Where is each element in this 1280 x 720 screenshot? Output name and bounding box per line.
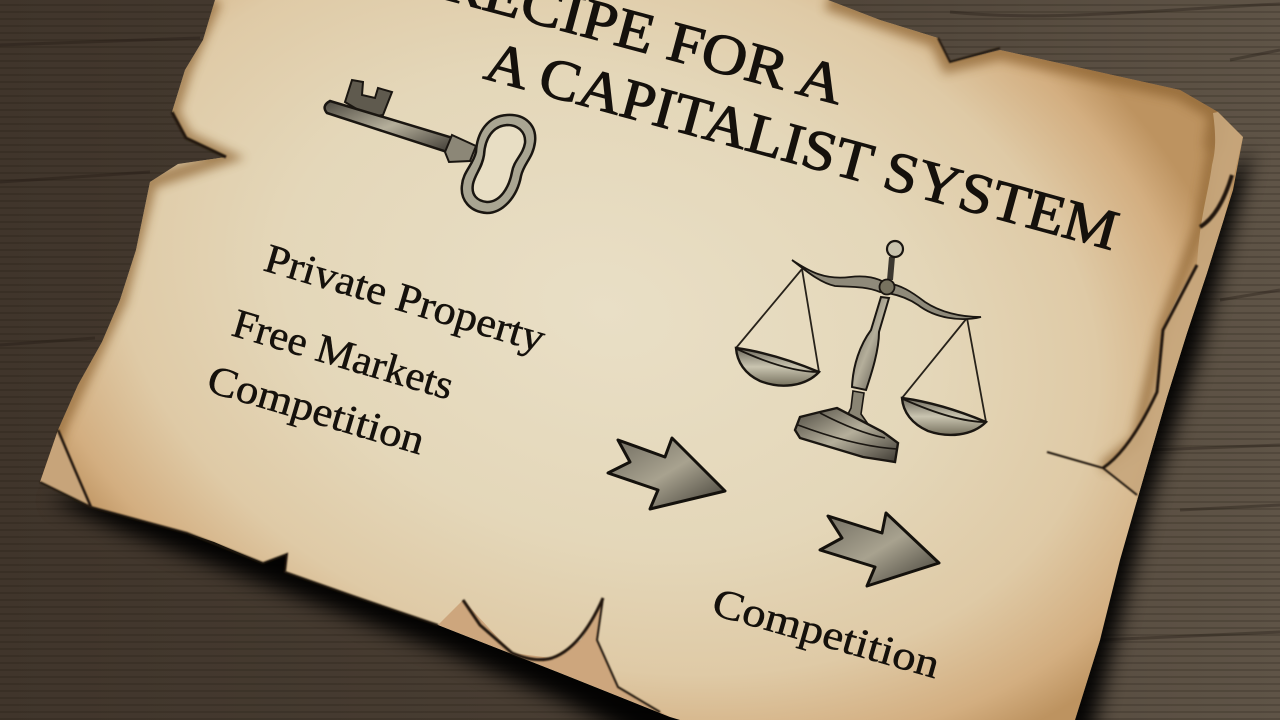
title: A CAPITALIST SYSTEM (479, 30, 1125, 263)
icon: balance scales (736, 241, 986, 462)
parchment shadow (50, 150, 1252, 720)
list: left ingredients: Competition (202, 356, 430, 463)
list: left ingredients (202, 235, 551, 463)
list: left ingredients: Free Markets (227, 300, 459, 408)
icon: key (325, 80, 535, 213)
label: lower competition: Competition (708, 578, 945, 687)
arrow: first (608, 438, 725, 509)
arrow: second (820, 513, 939, 586)
list: left ingredients: Private Property (259, 235, 551, 361)
